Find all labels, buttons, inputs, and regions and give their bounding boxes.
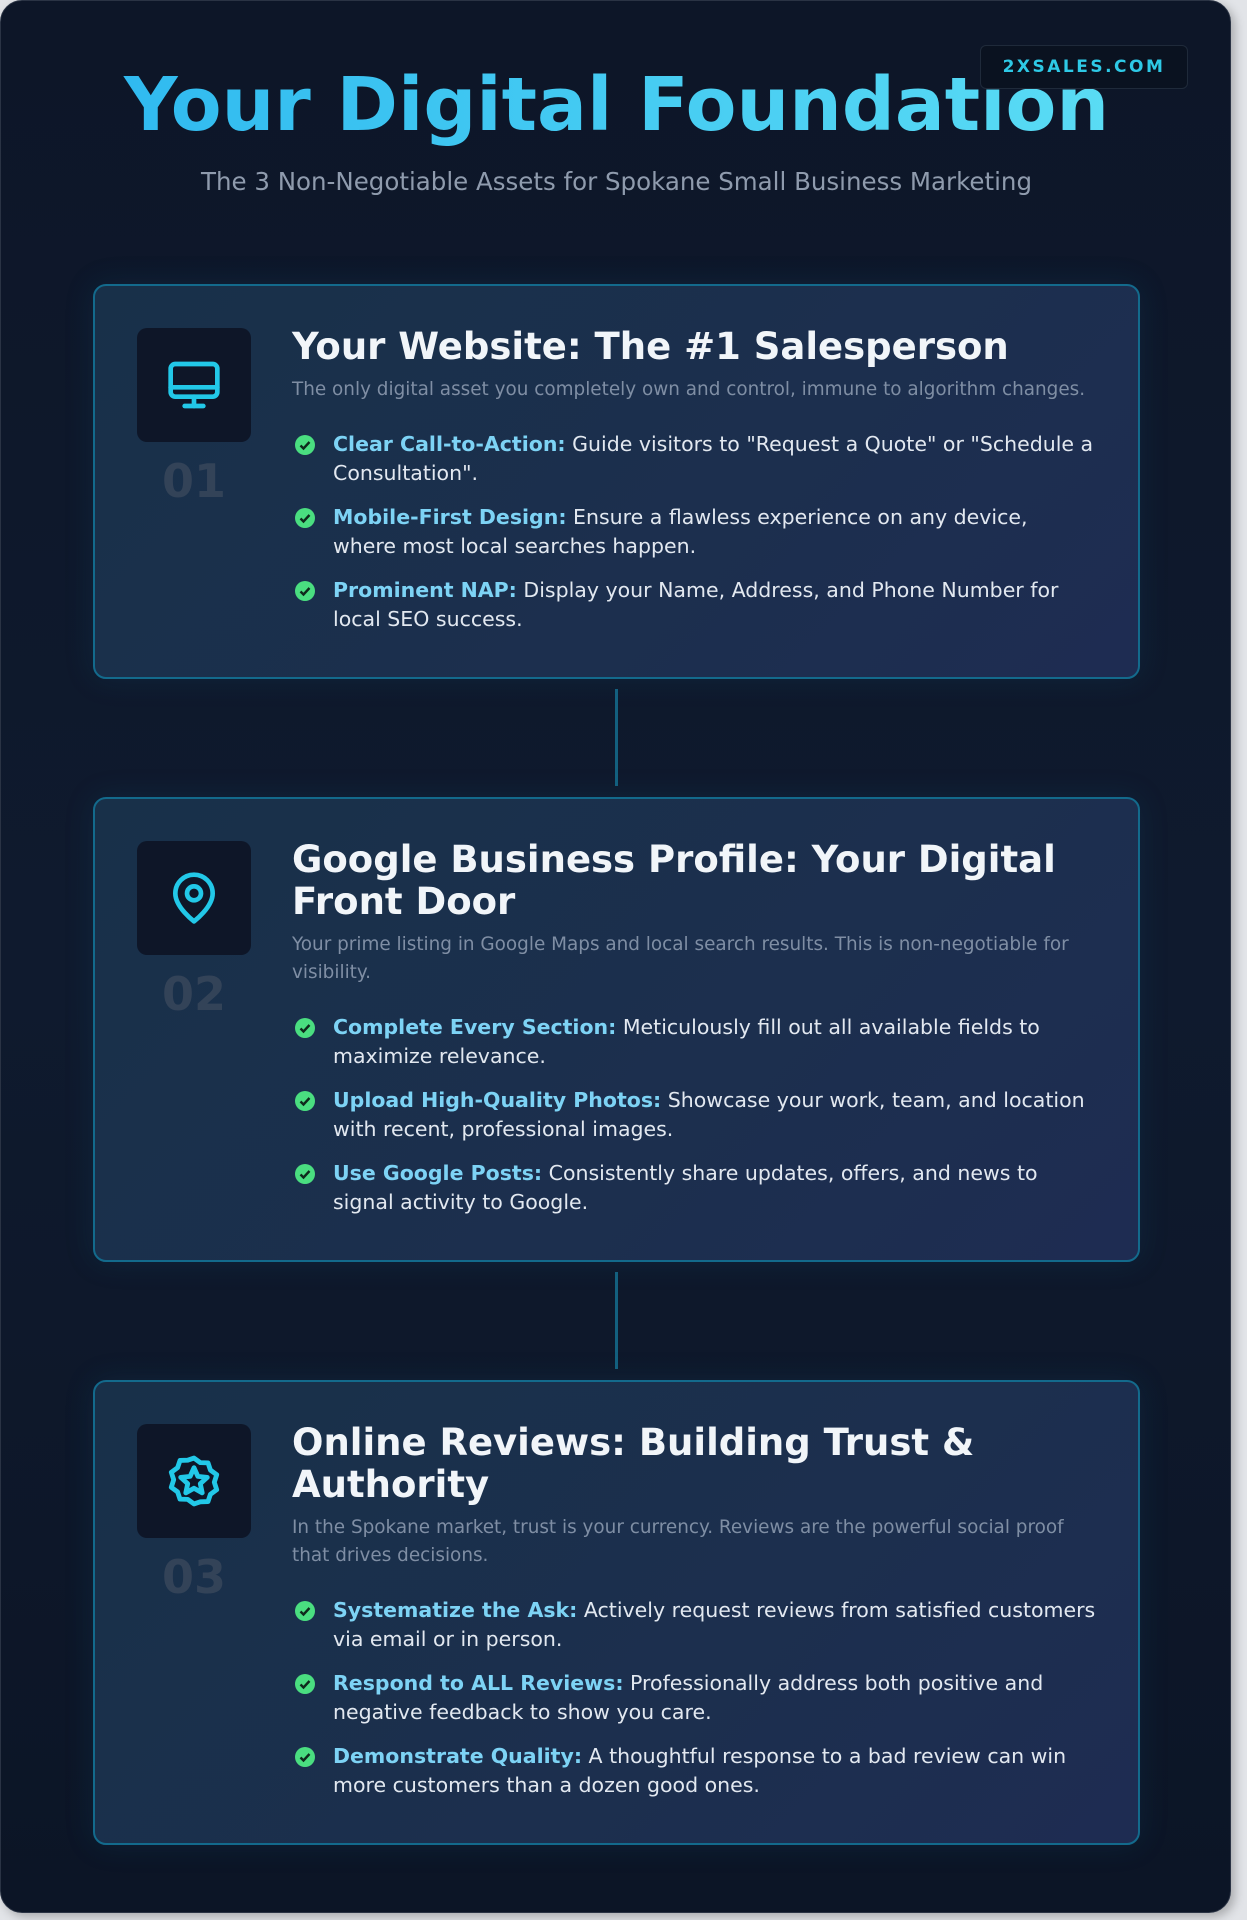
- text column: Upload High-Quality Photos: Showcase your work, team, and location with recent, professional images.: [333, 1088, 1085, 1141]
- title: Your Digital Foundation: [124, 62, 1109, 148]
- badge: [980, 45, 1188, 89]
- text column: where most local searches happen.: [333, 534, 696, 558]
- text column: Online Reviews: Building Trust & Authority: [292, 1421, 974, 1506]
- panel: google business profile: [93, 797, 1140, 1262]
- number 03: 03: [162, 1550, 226, 1604]
- text column: Clear Call-to-Action: Guide visitors to "Request a Quote" or "Schedule a Consultation".: [333, 432, 1093, 485]
- badge: 2XSALES.COM: [1003, 57, 1165, 77]
- text column: Your prime listing in Google Maps and local search results. This is non-negotiable for visibility.: [292, 934, 1069, 983]
- text column: The only digital asset you completely own and control, immune to algorithm changes.: [292, 379, 1085, 400]
- text column: Demonstrate Quality: A thoughtful response to a bad review can win more customers than a dozen good ones.: [333, 1744, 1066, 1797]
- icon: monitor: [137, 328, 251, 442]
- icon: map pin: [137, 841, 251, 955]
- panel: website: [93, 284, 1140, 679]
- icon: star badge: [137, 1424, 251, 1538]
- text column: Prominent NAP: Display your Name, Address, and Phone Number for local SEO success.: [333, 578, 1058, 631]
- subtitle: The 3 Non-Negotiable Assets for Spokane Small Business Marketing: [201, 167, 1032, 196]
- text column: [292, 325, 1093, 631]
- text column: Mobile-First Design: Ensure a flawless experience on any device,: [333, 505, 1028, 529]
- text column: [292, 1421, 1095, 1797]
- text column: Complete Every Section: Meticulously fill out all available fields to maximize relevance.: [333, 1015, 1040, 1068]
- text column: Respond to ALL Reviews: Professionally address both positive and negative feedback to show you care.: [333, 1671, 1043, 1724]
- number 01: 01: [162, 454, 226, 508]
- text column: Your Website: The #1 Salesperson: [292, 325, 1009, 368]
- text column: Systematize the Ask: Actively request reviews from satisfied customers via email or in person.: [333, 1598, 1095, 1651]
- text column: Use Google Posts: Consistently share updates, offers, and news to signal activity to Google.: [333, 1161, 1038, 1214]
- text column: [292, 838, 1085, 1214]
- text column: Google Business Profile: Your Digital Front Door: [292, 838, 1056, 923]
- number 02: 02: [162, 967, 226, 1021]
- text column: In the Spokane market, trust is your currency. Reviews are the powerful social proof that drives decisions.: [292, 1517, 1064, 1566]
- panel: online reviews: [93, 1380, 1140, 1845]
